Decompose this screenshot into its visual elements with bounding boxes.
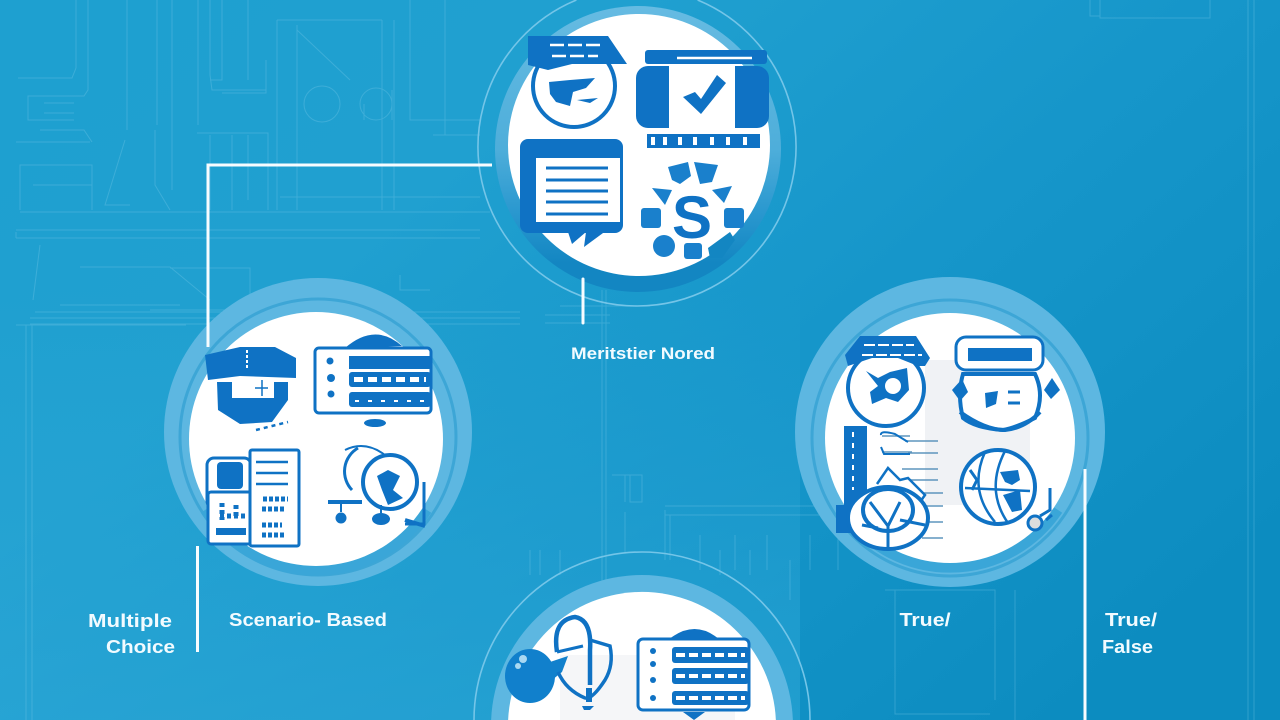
connector: left circle stem [196, 546, 199, 652]
icon: graduation cap [205, 347, 296, 430]
icon: cap with X [845, 336, 930, 426]
label: true false right: False [1102, 637, 1153, 657]
icon: ruler and compass [836, 426, 943, 549]
label: true false center: True/ [900, 610, 950, 630]
icon: globe and key [961, 450, 1052, 530]
icon: speech bubble document [520, 139, 623, 247]
connector: top circle to left circle [208, 165, 492, 347]
label: top circle: Meritstier Nored [571, 344, 715, 363]
icon: list panel [315, 334, 431, 427]
icon: list panel bottom [638, 629, 749, 720]
connector: top circle stem [582, 279, 584, 323]
panel: top circle [478, 0, 796, 306]
icon: magnifier with globe [328, 446, 425, 526]
panel: left circle [164, 278, 472, 586]
label: multiple choice: Multiple [88, 611, 172, 631]
label: true false right: True/ [1105, 610, 1157, 630]
icon: banner and shield [952, 337, 1060, 430]
icon: kettle and stethoscope [505, 617, 611, 710]
icon: dollar glyph: S [672, 184, 712, 251]
label: multiple choice: Choice [106, 637, 175, 657]
panel: right circle [795, 277, 1105, 587]
icon: graduation cap with map [528, 36, 627, 127]
icon: test sheets [207, 450, 299, 546]
connector: right circle stem [1084, 469, 1086, 720]
icon: coins with dollar sign [641, 162, 744, 259]
label: scenario based: Scenario- Based [229, 610, 387, 630]
panel: bottom circle [474, 552, 810, 720]
icon: browser window with checkmark [636, 50, 769, 148]
